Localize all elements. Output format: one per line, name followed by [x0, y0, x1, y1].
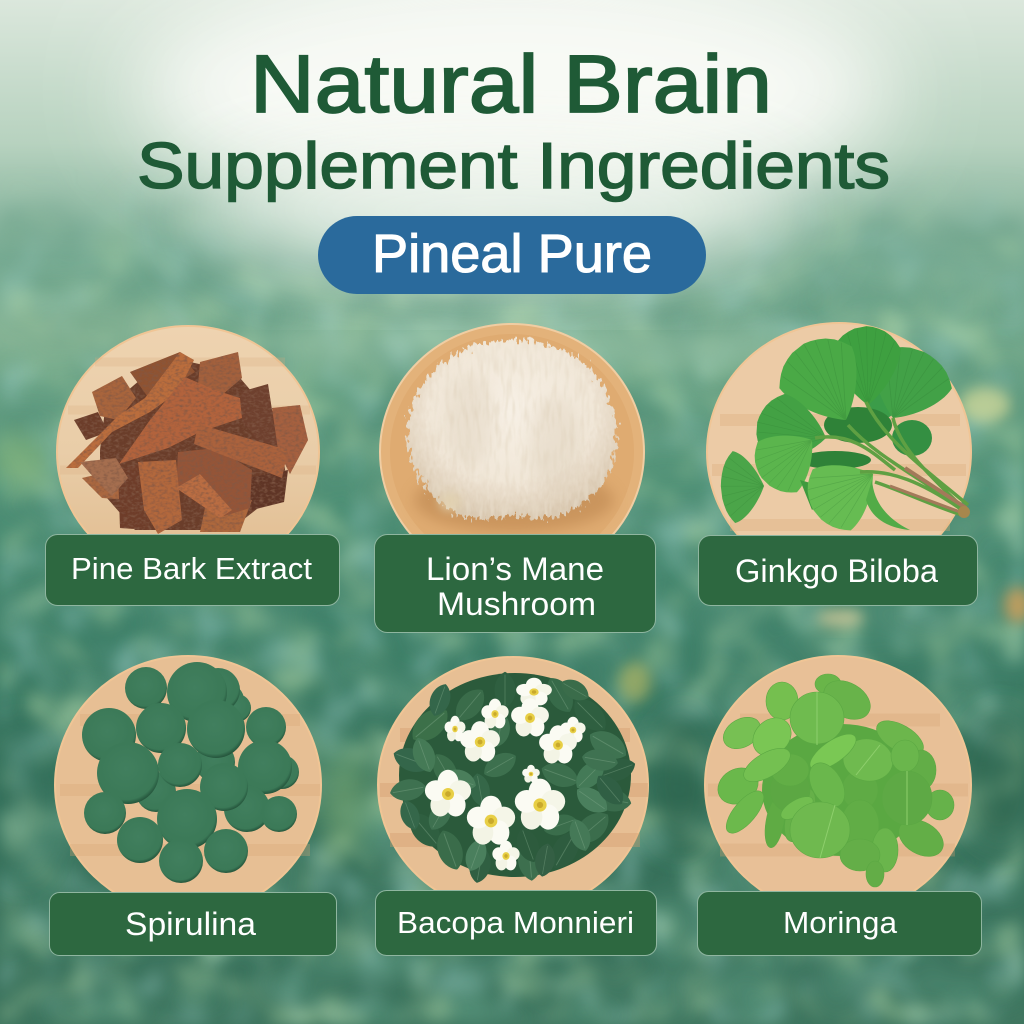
label: spirulina: Spirulina: [125, 906, 256, 942]
label: moringa: Moringa: [783, 905, 898, 940]
white flowers: [425, 678, 586, 870]
label: ginkgo biloba: [698, 536, 978, 606]
label: bacopa monnieri: Bacopa Monnieri: [397, 905, 634, 940]
label: lion's mane mushroom: Lion’s Mane: [426, 551, 604, 587]
panel: bacopa monnieri: [378, 657, 648, 913]
title: Natural Brain: [250, 39, 772, 130]
panel: spirulina: [55, 656, 321, 914]
label: pine bark extract: [46, 534, 340, 606]
label: lion's mane mushroom: [374, 534, 656, 632]
label: lion's mane mushroom: Mushroom: [437, 586, 596, 622]
wood plate: [705, 656, 971, 914]
label: ginkgo biloba: Ginkgo Biloba: [735, 553, 938, 589]
panel: pine bark extract: [56, 325, 320, 534]
panel: lion's mane mushroom: [379, 323, 645, 534]
ginkgo leaves and stems: [720, 324, 970, 541]
shaggy mushroom: [407, 340, 616, 519]
title: Supplement Ingredients: [137, 129, 890, 202]
spirulina tablets: [82, 662, 299, 883]
title: [137, 39, 890, 202]
brand badge: Pineal Pure: Pineal Pure: [372, 224, 652, 284]
wood plate: [706, 322, 972, 535]
label: spirulina: [50, 892, 336, 956]
label: moringa: [698, 892, 982, 956]
panel: ginkgo biloba: [706, 322, 972, 535]
brand badge: Pineal Pure: [318, 216, 706, 294]
wood plate: [55, 656, 321, 914]
wood plate: [378, 657, 648, 913]
wood plate: [379, 323, 645, 534]
label: bacopa monnieri: [376, 890, 656, 956]
moringa leaves: [711, 673, 954, 887]
panel: moringa: [705, 656, 971, 914]
bark pieces: [66, 352, 308, 534]
label: pine bark extract: Pine Bark Extract: [71, 551, 312, 586]
bacopa leaf mound: [388, 672, 639, 885]
wood plate: [56, 325, 320, 534]
